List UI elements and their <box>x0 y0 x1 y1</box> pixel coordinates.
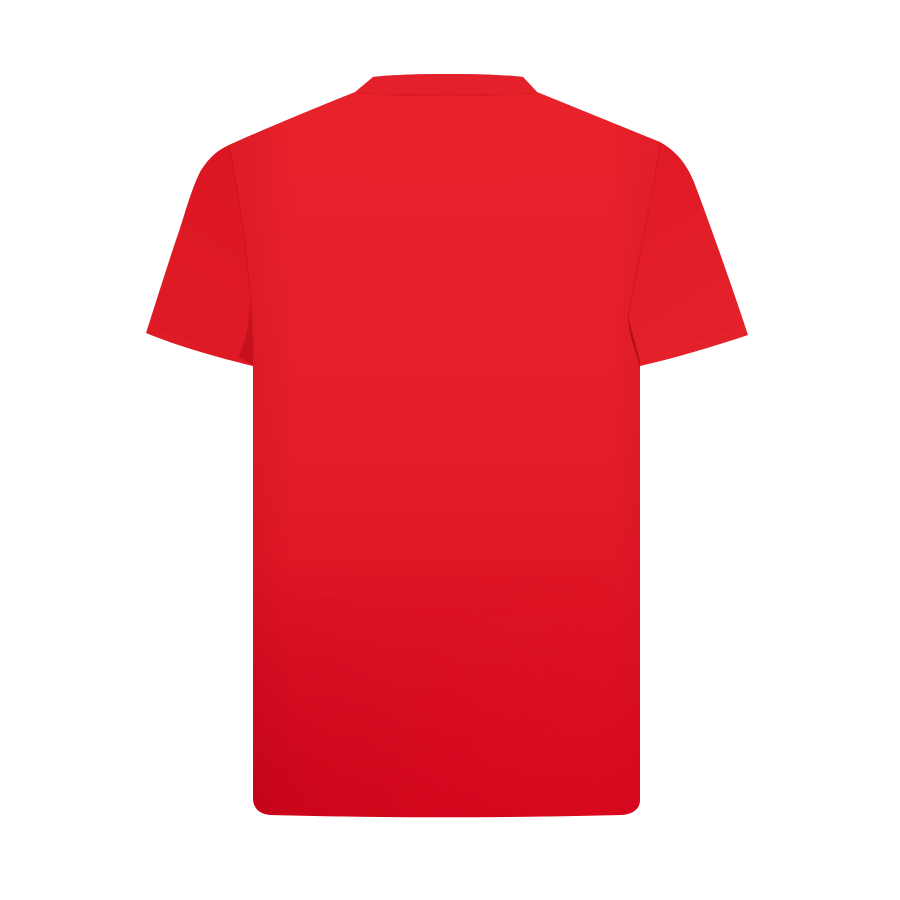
underarm shadows <box>238 300 640 368</box>
illustration: red t-shirt back view <box>146 74 748 818</box>
collar <box>358 74 537 96</box>
shirt body <box>229 74 660 817</box>
seams <box>152 143 742 806</box>
left sleeve <box>146 145 254 366</box>
right sleeve <box>628 142 748 366</box>
